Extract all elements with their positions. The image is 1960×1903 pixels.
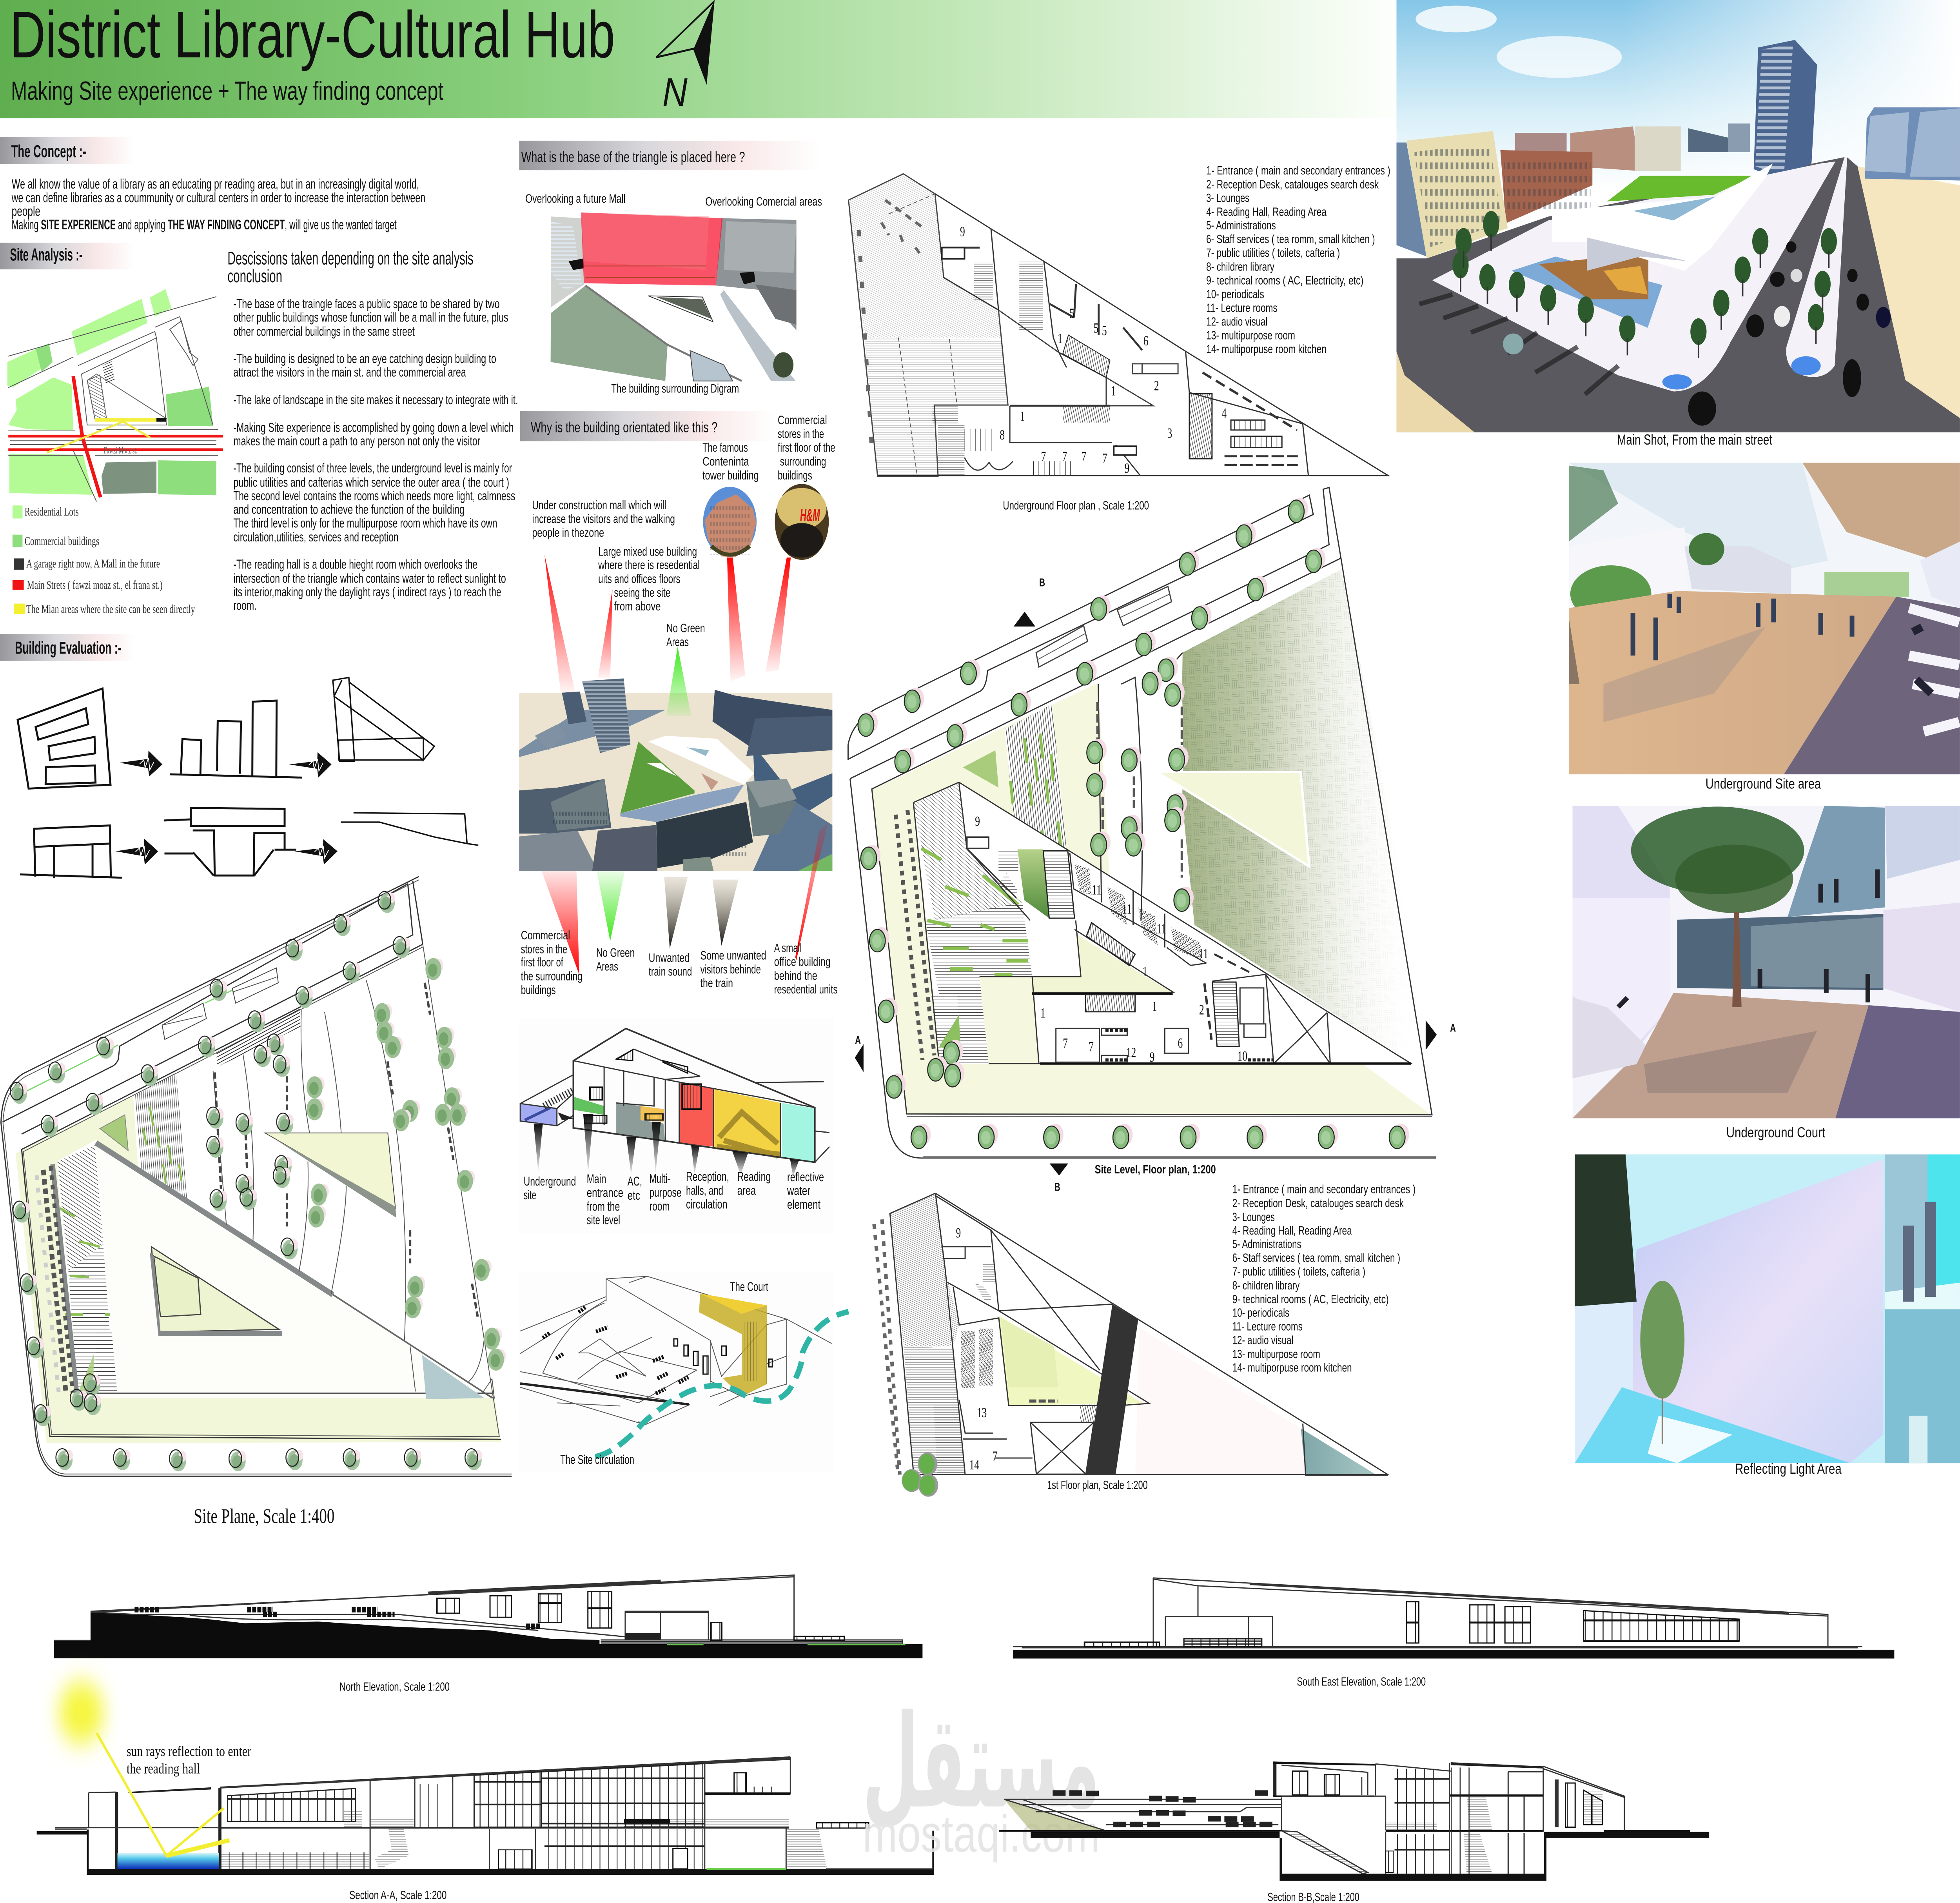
- photo: commercial store: [775, 484, 829, 560]
- panel: north elevation: [54, 1575, 922, 1693]
- site analysis decisions text: intersection of the triangle which contains water to reflect sunlight to: [233, 571, 506, 586]
- axonometric labels: site: [524, 1188, 536, 1202]
- render: main street view: [1396, 0, 1960, 432]
- icon: sun glow: [59, 1681, 104, 1744]
- trees: first floor planting: [902, 1453, 938, 1497]
- heading: building evaluation: Building Evaluation :-: [15, 639, 121, 658]
- panel: why building orientation: [519, 411, 837, 997]
- axonometric labels: water: [787, 1184, 811, 1198]
- map street label: Fawzi Moaz st.: [104, 445, 138, 456]
- site analysis decisions text: [233, 296, 518, 613]
- site level room numbers: 12: [1126, 1044, 1136, 1060]
- site plan caption: Site Plane, Scale 1:400: [194, 1505, 334, 1528]
- label: unwanted visitors: Some unwanted: [701, 948, 766, 962]
- underground room numbers: 5: [1094, 320, 1098, 336]
- map legend: The Mian areas where the site can be seen directly: [26, 602, 195, 616]
- site level room numbers: 9: [1150, 1049, 1154, 1065]
- axonometric labels: element: [787, 1197, 820, 1212]
- first floor room numbers: 14: [969, 1457, 979, 1473]
- panel: underground floor plan: [849, 164, 1390, 512]
- first floor room numbers: 7: [993, 1448, 997, 1464]
- underground room numbers: 1: [1111, 383, 1116, 398]
- site level room numbers: 11: [1157, 921, 1166, 937]
- label: commercial areas: Overlooking Comercial areas: [705, 194, 822, 208]
- heading: base of triangle question: What is the base of the triangle is placed here ?: [521, 149, 745, 165]
- first floor room legend: 7- public utilities ( toilets, cafteria ): [1232, 1265, 1365, 1278]
- axonometric labels: area: [737, 1184, 756, 1198]
- label: no green bottom: No Green: [596, 946, 635, 959]
- axonometric labels: entrance: [587, 1186, 623, 1200]
- first floor room legend: 4- Reading Hall, Reading Area: [1232, 1224, 1352, 1237]
- site level room numbers: [975, 813, 1247, 1065]
- section labels: A: [855, 1034, 861, 1047]
- first floor room legend: 1- Entrance ( main and secondary entrances ): [1232, 1182, 1416, 1196]
- underground room numbers: 5: [1102, 323, 1107, 338]
- heading: site analysis: Site Analysis :-: [10, 245, 82, 265]
- underground room numbers: 2: [1154, 378, 1159, 394]
- panel: render reflecting light: [1575, 1154, 1960, 1477]
- underground room numbers: 1: [1020, 408, 1025, 424]
- panel: render main shot: [1396, 0, 1960, 448]
- axonometric labels: Underground: [524, 1175, 576, 1189]
- first floor room legend: 12- audio visual: [1232, 1333, 1293, 1347]
- first floor room numbers: [956, 1225, 997, 1473]
- label: large mixed use building: uits and offices floors: [598, 572, 681, 586]
- heading: site analysis conclusion: conclusion: [227, 266, 282, 286]
- concept text: We all know the value of a library as an educating pr reading area, but in an increasingly digital world,: [12, 176, 419, 192]
- label: commercial stores top: [778, 413, 835, 482]
- south east elevation drawing: [1013, 1578, 1894, 1658]
- section marker: B top: [1014, 612, 1035, 626]
- first floor room legend: 8- children library: [1232, 1279, 1300, 1292]
- label: no green bottom: Areas: [596, 959, 618, 973]
- icon: north arrow: [656, 2, 714, 114]
- spike: main entrance: [583, 1114, 593, 1173]
- underground room legend: 11- Lecture rooms: [1206, 301, 1278, 314]
- evaluation sketches: [18, 677, 478, 878]
- underground room numbers: 7: [1041, 449, 1046, 464]
- first floor room legend: 9- technical rooms ( AC, Electricity, etc): [1232, 1293, 1389, 1306]
- underground room legend: 14- multiporpuse room kitchen: [1206, 342, 1327, 356]
- label: commercial stores bottom: first floor of: [521, 955, 563, 969]
- first floor plan drawing: [874, 1193, 1388, 1497]
- underground room legend: 5- Administrations: [1206, 218, 1276, 232]
- underground room numbers: 6: [1143, 333, 1149, 349]
- site level room numbers: 1: [1143, 964, 1147, 979]
- first floor room legend: 6- Staff services ( tea romm, small kitchen ): [1232, 1251, 1400, 1265]
- spike: continental tower: [727, 557, 745, 681]
- concept text: Making SITE EXPERIENCE and applying THE WAY FINDING CONCEPT, will give us the wanted target: [12, 217, 397, 232]
- label: small office building: behind the: [774, 968, 817, 982]
- label: commercial stores bottom: stores in the: [521, 942, 567, 956]
- spike: mixed use building: [598, 589, 612, 678]
- site analysis decisions text: attract the visitors in the main st. and the commercial area: [233, 365, 466, 380]
- site analysis decisions text: -The reading hall is a double hieght room which overlooks the: [233, 557, 477, 572]
- first floor room numbers: 13: [977, 1405, 987, 1420]
- underground room numbers: 9: [960, 223, 965, 240]
- label: small office building: office building: [774, 955, 831, 968]
- site level room numbers: 10: [1238, 1048, 1247, 1064]
- panel: section B-B: [999, 1761, 1709, 1903]
- label: no green top: Areas: [666, 635, 689, 649]
- label: train sound: [649, 951, 692, 978]
- site level caption: Site Level, Floor plan, 1:200: [1095, 1162, 1216, 1176]
- heading: site analysis conclusion: Descissions taken depending on the site analysis: [227, 248, 474, 269]
- spike: ac: [626, 1137, 636, 1175]
- caption: main shot: Main Shot, From the main street: [1617, 432, 1772, 448]
- panel: building evaluation: [0, 634, 478, 878]
- axonometric labels: circulation: [686, 1197, 728, 1212]
- label: large mixed use building: seeing the site: [614, 585, 670, 599]
- site analysis decisions text: makes the main court a path to any person not only the visitor: [233, 434, 481, 449]
- section A-A drawing: [37, 1733, 934, 1875]
- first floor room legend: 5- Administrations: [1232, 1237, 1301, 1251]
- label: commercial stores top: stores in the: [778, 427, 824, 441]
- spike: small office: [795, 822, 828, 960]
- spike: train sound: [664, 877, 688, 949]
- label: continental tower: Conteninta: [702, 454, 749, 468]
- map legend: Main Strets ( fawzi moaz st., el frana st.): [27, 578, 163, 592]
- watermark: [862, 1688, 1100, 1863]
- caption: reflecting light area: Reflecting Light Area: [1735, 1461, 1842, 1477]
- underground room numbers: 4: [1221, 405, 1227, 421]
- axonometric labels: [524, 1170, 824, 1228]
- site level room numbers: 1: [1152, 998, 1157, 1014]
- axonometric labels: AC,: [628, 1175, 642, 1189]
- photo text: store sign: H&M: [800, 506, 820, 525]
- first floor room numbers: 9: [956, 1225, 961, 1241]
- panel: render underground site area: [1569, 463, 1960, 792]
- site analysis map: [7, 289, 223, 501]
- site analysis decisions text: its interior,making only the daylight rays ( indirect rays ) to reach the: [233, 585, 501, 599]
- site analysis decisions text: and concentration to achieve the function of the building: [233, 502, 465, 517]
- label: commercial stores top: surrounding: [780, 454, 826, 468]
- label: large mixed use building: from above: [614, 599, 661, 613]
- underground room numbers: 9: [1125, 460, 1129, 476]
- section labels: B: [1054, 1181, 1060, 1193]
- panel: site plan: [1, 877, 512, 1528]
- underground room legend: 6- Staff services ( tea romm, small kitchen ): [1206, 232, 1375, 246]
- first floor room legend: 10- periodicals: [1232, 1306, 1289, 1319]
- underground room legend: 12- audio visual: [1206, 315, 1267, 328]
- label: small office building: A small: [774, 941, 802, 955]
- label: commercial stores top: buildings: [778, 468, 812, 482]
- panel: the concept: [0, 137, 425, 232]
- icon: process arrow 2: [289, 752, 332, 777]
- underground room legend: 9- technical rooms ( AC, Electricity, etc): [1206, 274, 1363, 287]
- caption: underground site area: Underground Site area: [1706, 775, 1821, 792]
- label: train sound: train sound: [649, 964, 692, 978]
- panel: first floor plan: [874, 1182, 1416, 1497]
- site analysis decisions text: -The building consist of three levels, the underground level is mainly for: [233, 461, 512, 476]
- axonometric labels: room: [650, 1199, 670, 1214]
- section labels: A: [1450, 1022, 1456, 1035]
- underground room numbers: 3: [1167, 425, 1172, 441]
- panel: section A-A: [37, 1681, 934, 1902]
- site analysis decisions text: public utilities and cafterias which service the outer area ( the court ): [233, 475, 509, 490]
- concept text: [11, 176, 425, 232]
- axonometric labels: from the: [587, 1199, 620, 1214]
- underground room legend: 8- children library: [1206, 260, 1274, 273]
- label: continental tower: The famous: [702, 440, 748, 454]
- label: train sound: Unwanted: [649, 951, 690, 964]
- title banner: [0, 0, 1397, 118]
- south east elevation caption: South East Elevation, Scale 1:200: [1297, 1675, 1426, 1689]
- orientation diagram: [519, 484, 832, 975]
- heading: orientation question: Why is the building orientated like this ?: [531, 419, 717, 435]
- underground room legend: 13- multipurpose room: [1206, 329, 1295, 342]
- label: under construction mall: people in thezone: [532, 525, 604, 539]
- spike: reading: [732, 1150, 748, 1175]
- spike: reception: [691, 1145, 699, 1174]
- panel: why base of triangle: [519, 141, 822, 395]
- sun rays annotation: [127, 1743, 251, 1777]
- panel: site analysis: [0, 243, 518, 616]
- label: no green top: No Green: [666, 621, 705, 635]
- site plan drawing: [1, 877, 512, 1476]
- axonometric labels: Reading: [737, 1170, 771, 1184]
- site level room numbers: 7: [1089, 1039, 1094, 1054]
- underground room numbers: 8: [1000, 427, 1005, 443]
- icon: process arrow 1: [120, 751, 162, 777]
- underground room numbers: 5: [1069, 305, 1074, 321]
- site analysis decisions text: other public buildings whose function will be a mall in the future, plus: [233, 310, 508, 325]
- underground room legend: [1206, 164, 1390, 356]
- site analysis decisions text: -The building is designed to be an eye catching design building to: [233, 351, 496, 366]
- site level room numbers: 11: [1199, 946, 1208, 961]
- label: large mixed use building: [598, 545, 700, 613]
- label: unwanted visitors: [701, 948, 766, 990]
- site analysis decisions text: The third level is only for the multipurpose room which have its own: [233, 516, 497, 531]
- spike: commercial stores top: [765, 557, 791, 673]
- axonometric drawing: [519, 1019, 834, 1234]
- sun ray reflection lines: [97, 1733, 229, 1856]
- first floor room legend: [1232, 1182, 1416, 1375]
- map legend: [13, 505, 195, 616]
- map legend: Residential Lots: [25, 505, 79, 518]
- underground room legend: 10- periodicals: [1206, 287, 1264, 301]
- underground room legend: 1- Entrance ( main and secondary entrances ): [1206, 164, 1390, 177]
- label: small office building: resedential units: [774, 982, 837, 996]
- first floor room legend: 13- multipurpose room: [1232, 1347, 1320, 1361]
- label: commercial stores bottom: [521, 928, 583, 997]
- label: commercial stores bottom: the surrounding: [521, 969, 583, 983]
- axonometric labels: Main: [587, 1172, 606, 1186]
- underground room numbers: 7: [1082, 449, 1086, 464]
- first floor room legend: 11- Lecture rooms: [1232, 1320, 1303, 1333]
- section marker: B bottom: [1050, 1164, 1068, 1176]
- label: continental tower: [702, 440, 759, 482]
- label: commercial stores bottom: Commercial: [521, 928, 570, 942]
- first floor caption: 1st Floor plan, Scale 1:200: [1047, 1478, 1148, 1492]
- sun rays annotation: the reading hall: [127, 1761, 200, 1777]
- first floor room legend: 2- Reception Desk, catalouges search desk: [1232, 1197, 1404, 1210]
- section marker: A right: [1426, 1021, 1437, 1050]
- label: no green bottom: [596, 946, 635, 973]
- label: under construction mall: [532, 498, 675, 539]
- label: no green top: [666, 621, 705, 649]
- spike: mall: [544, 555, 575, 693]
- spike: multipurpose: [652, 1122, 661, 1173]
- underground room legend: 4- Reading Hall, Reading Area: [1206, 205, 1327, 219]
- site level room numbers: 11: [1092, 882, 1102, 898]
- site level room numbers: 6: [1178, 1035, 1183, 1051]
- map legend: A garage right now, A Mall in the future: [26, 557, 160, 570]
- label: commercial stores top: Commercial: [778, 413, 827, 427]
- underground room numbers: [960, 223, 1227, 476]
- north elevation caption: North Elevation, Scale 1:200: [339, 1680, 450, 1693]
- site analysis decisions text: -Making Site experience is accomplished by going down a level which: [233, 420, 514, 435]
- site analysis decisions text: other commercial buildings in the same street: [233, 324, 415, 339]
- site level room numbers: 1: [1040, 1005, 1045, 1021]
- photo: continental tower: [703, 487, 757, 557]
- concept text: people: [12, 203, 40, 219]
- caption: underground court: Underground Court: [1726, 1124, 1825, 1140]
- section labels: B: [1039, 576, 1045, 589]
- spike: no green top: [666, 647, 691, 716]
- watermark: مستقل: [862, 1688, 1100, 1837]
- underground room numbers: 7: [1102, 450, 1107, 466]
- site level room numbers: 7: [1063, 1035, 1068, 1051]
- watermark: mostaqi.com: [862, 1804, 1100, 1863]
- axonometric labels: etc: [628, 1188, 640, 1203]
- site analysis decisions text: -The lake of landscape in the site makes it necessary to integrate with it.: [233, 392, 518, 407]
- label: commercial stores top: first floor of the: [778, 440, 835, 454]
- subtitle: Making Site experience + The way finding concept: [11, 77, 443, 106]
- section labels: [855, 576, 1456, 1193]
- site analysis decisions text: -The base of the traingle faces a public space to be shared by two: [233, 296, 500, 311]
- render: reflecting light area: [1575, 1154, 1960, 1463]
- label: continental tower: tower building: [702, 468, 759, 482]
- panel: sectional axonometric: [519, 1019, 834, 1234]
- map legend: Commercial buildings: [25, 534, 99, 548]
- axonometric labels: purpose: [650, 1186, 682, 1200]
- label: unwanted visitors: the train: [701, 976, 733, 990]
- underground room legend: 7- public utilities ( toilets, cafteria ): [1206, 246, 1340, 260]
- axonometric labels: Reception,: [686, 1170, 729, 1184]
- site level room numbers: 2: [1199, 1002, 1204, 1017]
- icon: process arrow 4: [295, 839, 338, 864]
- site level room numbers: 11: [1122, 901, 1132, 917]
- axonometric labels: halls, and: [686, 1184, 723, 1198]
- icon: north arrow: N: [662, 70, 688, 114]
- label: large mixed use building: where there is resedential: [598, 558, 700, 572]
- first floor room legend: 14- multiporpuse room kitchen: [1232, 1361, 1352, 1375]
- site level room numbers: 9: [975, 813, 980, 829]
- spike: commercial bottom: [542, 871, 579, 975]
- caption: surrounding diagram: The building surrounding Digram: [611, 381, 739, 395]
- spike: underground site: [534, 1124, 543, 1172]
- underground room numbers: 7: [1062, 449, 1067, 464]
- label: under construction mall: Under construction mall which will: [532, 498, 666, 512]
- title: District Library-Cultural Hub: [10, 0, 615, 72]
- underground room legend: 2- Reception Desk, catalouges search desk: [1206, 178, 1379, 191]
- underground plan drawing: [849, 174, 1388, 476]
- sun rays annotation: sun rays reflection to enter: [127, 1743, 251, 1760]
- underground plan caption: Underground Floor plan , Scale 1:200: [1003, 499, 1149, 512]
- north elevation drawing: [54, 1575, 922, 1658]
- underground room legend: 3- Lounges: [1206, 191, 1249, 205]
- section A-A caption: Section A-A, Scale 1:200: [349, 1888, 446, 1902]
- label: under construction mall: increase the visitors and the walking: [532, 512, 675, 526]
- render: underground site: [1569, 463, 1960, 774]
- label: the court: The Court: [730, 1280, 768, 1294]
- first floor room legend: 3- Lounges: [1232, 1210, 1275, 1224]
- label: unwanted visitors: visitors behinde: [701, 962, 761, 976]
- circulation drawing: [519, 1272, 849, 1472]
- label: site circulation: The Site circulation: [560, 1453, 634, 1467]
- label: commercial stores bottom: buildings: [521, 983, 556, 997]
- site level plan drawing: [848, 487, 1437, 1176]
- render: underground court: [1573, 806, 1960, 1118]
- heading: the concept: The Concept :-: [11, 142, 86, 161]
- section marker: A left: [855, 1044, 864, 1072]
- label: small office building: [774, 941, 837, 996]
- spike: water: [790, 1159, 799, 1176]
- axonometric labels: site level: [587, 1213, 620, 1228]
- panel: south east elevation: [1013, 1578, 1894, 1689]
- spike: unwanted visitors: [713, 880, 739, 946]
- spike: no green bottom: [597, 871, 625, 941]
- site analysis decisions text: circulation,utilities, services and reception: [233, 530, 399, 545]
- axonometric labels: Multi-: [650, 1171, 670, 1186]
- panel: site level floor plan: [848, 487, 1456, 1193]
- underground room numbers: 1: [1058, 330, 1063, 346]
- panel: site circulation axonometric: [519, 1272, 849, 1472]
- label: large mixed use building: Large mixed use building: [598, 545, 697, 559]
- icon: process arrow 3: [116, 839, 158, 864]
- label: future mall: Overlooking a future Mall: [525, 191, 626, 205]
- the court highlight: [699, 1293, 767, 1396]
- panel: render underground court: [1573, 806, 1960, 1140]
- site analysis decisions text: room.: [233, 598, 257, 613]
- axonometric labels: reflective: [787, 1170, 824, 1184]
- concept text: we can define libraries as a coummunity or cultural centers in order to increase the interaction between: [11, 190, 425, 205]
- section B-B drawing: [999, 1761, 1709, 1881]
- heading: site analysis conclusion: [227, 248, 474, 286]
- surrounding diagram: [551, 212, 797, 381]
- site analysis decisions text: The second level contains the rooms which needs more light, calmness: [233, 488, 515, 503]
